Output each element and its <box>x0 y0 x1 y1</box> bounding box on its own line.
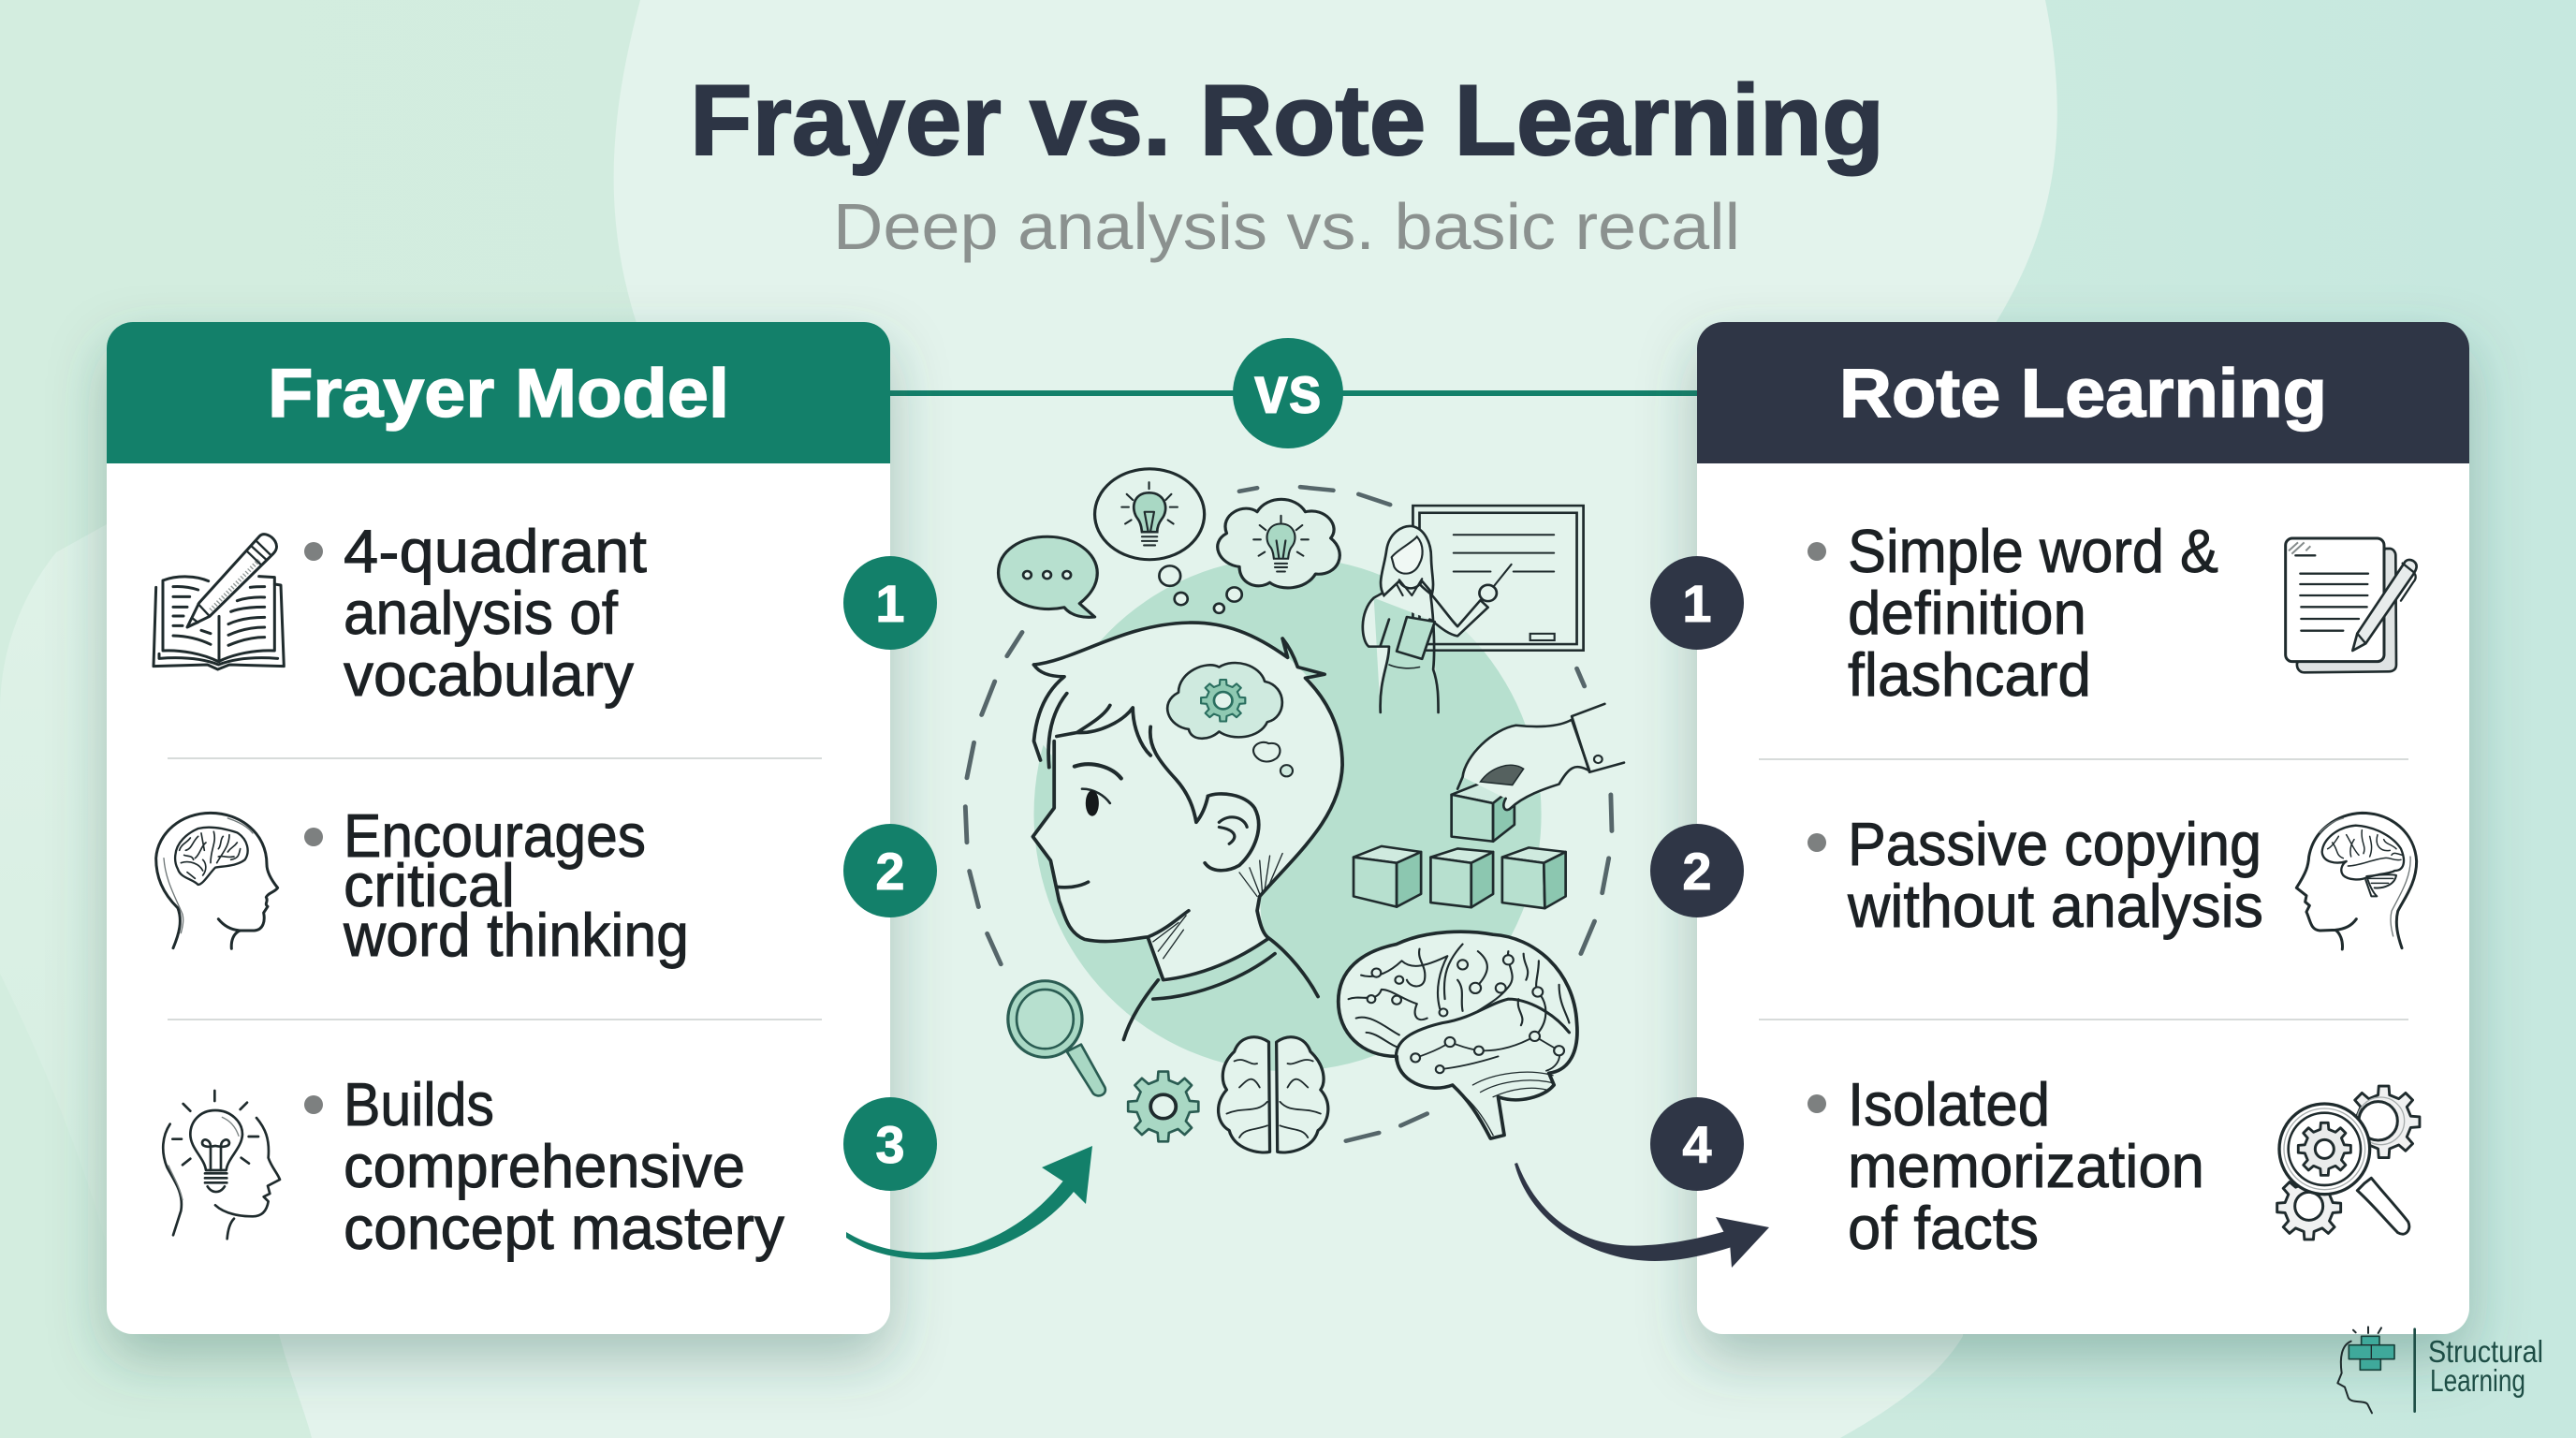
panel: Frayer Model <box>107 322 890 1334</box>
thought bubble with bulb <box>1095 469 1242 613</box>
icon: open book with pencil <box>154 535 284 669</box>
header: Rote Learning: Rote Learning <box>1839 356 2327 432</box>
number badges: Rote: 1 <box>1682 574 1712 633</box>
text: Passive copying without analysis: without analysis <box>1847 872 2263 940</box>
speech bubble <box>999 536 1097 617</box>
arrow: green curve into illustration <box>846 1146 1092 1259</box>
text: 4-quadrant analysis of vocabulary: analysis of <box>344 579 619 647</box>
logo: Structural Learning: Learning <box>2430 1363 2525 1398</box>
text: 4-quadrant analysis of vocabulary <box>304 517 647 709</box>
header: Frayer Model <box>107 322 890 463</box>
connector line with VS badge: vs <box>1254 353 1322 428</box>
number badges: Rote <box>1650 556 1744 1191</box>
text: Passive copying without analysis: Passive copying <box>1848 810 2261 878</box>
text: Passive copying without analysis <box>1808 810 2263 940</box>
arrow: navy curve into Rote panel <box>1515 1163 1769 1268</box>
teacher at whiteboard <box>1363 506 1584 712</box>
number badges: Frayer: 3 <box>875 1115 905 1174</box>
icon: document with pen <box>2286 538 2417 672</box>
text: Isolated memorization of facts <box>1808 1070 2204 1262</box>
hand placing block <box>1452 704 1624 842</box>
number badges: Rote: 2 <box>1682 842 1712 901</box>
text: Builds comprehensive concept mastery: concept mastery <box>344 1194 784 1262</box>
text: Encourages critical word thinking: Encourages <box>344 801 646 870</box>
number badges: Rote: 4 <box>1682 1115 1712 1174</box>
text: 4-quadrant analysis of vocabulary: vocabulary <box>344 640 634 709</box>
thought cloud with bulb <box>1218 499 1339 588</box>
number badges: Frayer: 1 <box>875 574 905 633</box>
gear <box>1128 1072 1198 1141</box>
header: Frayer Model: Frayer Model <box>268 356 729 432</box>
text: Encourages critical word thinking <box>304 801 689 969</box>
text: Simple word & definition flashcard <box>1808 517 2218 709</box>
icon: head with brain, side view <box>2296 813 2417 949</box>
text: Encourages critical word thinking: critical <box>344 851 515 919</box>
text: Simple word & definition flashcard: flashcard <box>1848 640 2091 709</box>
mint circle backdrop <box>1033 557 1542 1071</box>
logo: Structural Learning: Structural <box>2428 1334 2543 1369</box>
text: Isolated memorization of facts: Isolated <box>1848 1070 2050 1138</box>
icon: head with brain <box>156 813 278 948</box>
magnifying glass <box>1008 981 1105 1095</box>
text: 4-quadrant analysis of vocabulary: 4-quadrant <box>344 517 647 585</box>
text: Builds comprehensive concept mastery: Builds <box>344 1070 494 1138</box>
number badges: Frayer: 2 <box>875 842 905 901</box>
text: Builds comprehensive concept mastery: comprehensive <box>344 1132 745 1200</box>
detailed brain with circuit nodes <box>1339 932 1577 1138</box>
row of three blocks <box>1354 846 1566 908</box>
thought cloud with gear <box>1167 663 1293 776</box>
top-view brain <box>1219 1037 1328 1152</box>
icon: head with lightbulb <box>163 1091 280 1239</box>
text: Builds comprehensive concept mastery <box>304 1070 784 1262</box>
text: Simple word & definition flashcard: definition <box>1848 579 2086 647</box>
text: Isolated memorization of facts: of facts <box>1848 1194 2039 1262</box>
text: Isolated memorization of facts: memorization <box>1848 1132 2204 1200</box>
dashed ring <box>965 487 1612 1141</box>
connector line with VS badge <box>890 338 1697 448</box>
child head profile <box>1032 623 1342 1040</box>
icon: magnifier and gears <box>2277 1086 2420 1240</box>
title: Frayer vs. Rote Learning <box>690 64 1884 176</box>
text: Encourages critical word thinking: word thinking <box>343 901 689 969</box>
logo: Structural Learning <box>2337 1327 2543 1413</box>
number badges: Frayer <box>843 556 937 1191</box>
header: Rote Learning <box>1697 322 2469 463</box>
panel: Rote Learning <box>1697 322 2469 1334</box>
central illustration <box>965 469 1624 1152</box>
text: Simple word & definition flashcard: Simple word & <box>1848 517 2218 585</box>
subtitle: Deep analysis vs. basic recall <box>833 190 1740 263</box>
